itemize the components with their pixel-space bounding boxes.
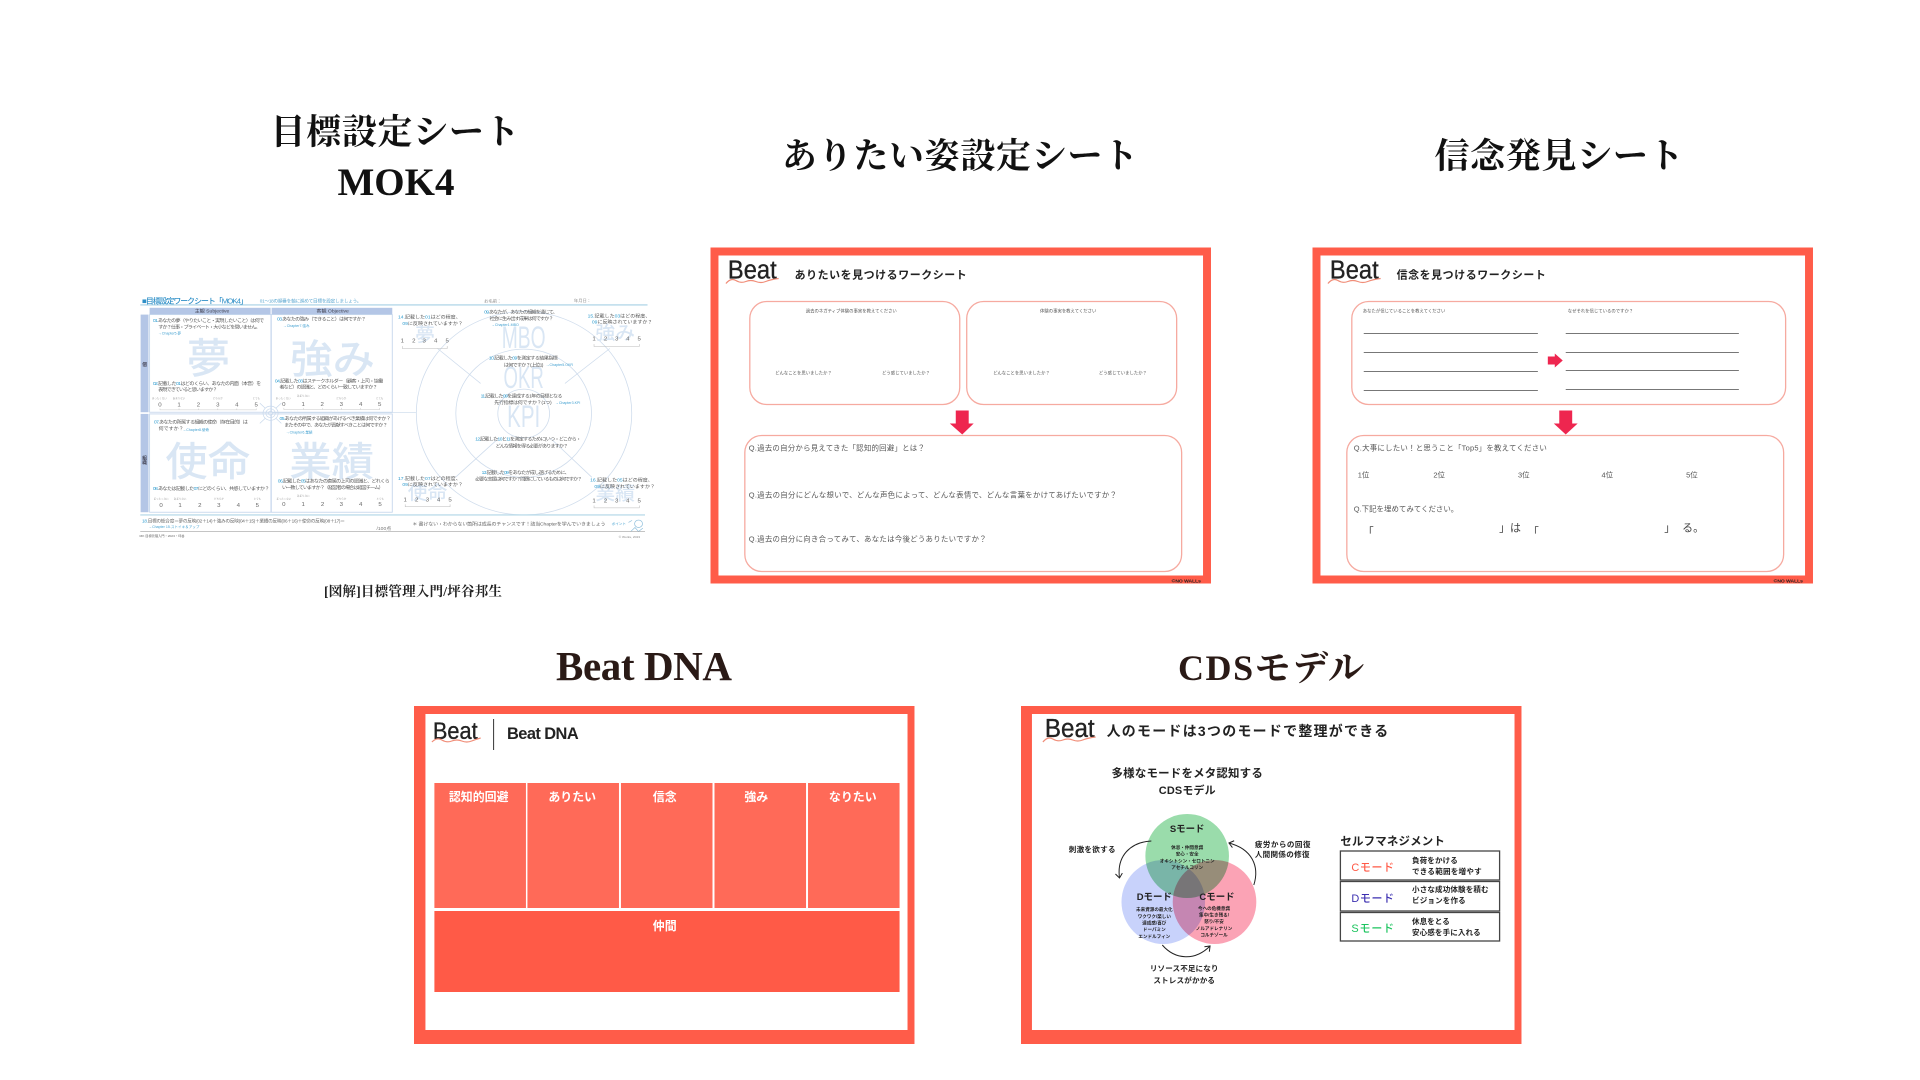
rating scales: left quadrants: とても: [376, 396, 384, 400]
box: top5: 3位: [1518, 469, 1530, 480]
header bands: 客観 Objective: [317, 308, 349, 315]
questions: left quadrants: →Chapter5.夢: [158, 330, 182, 335]
corner question: 16: 2: [604, 499, 607, 505]
questions: left quadrants: 04.記載した03はステークホルダー（顧客・上司・協働: [275, 378, 383, 384]
rating scales: left quadrants: [152, 393, 384, 509]
column: なりたい: なりたい: [829, 790, 877, 804]
corner question: 14: 5: [446, 339, 450, 345]
title: Beat DNA: Beat DNA: [556, 643, 732, 689]
box: questions: Q.過去の自分から見えてきた「認知的回避」とは？: [749, 442, 925, 453]
questions: diagram centre: 12.記載した10と11を測定するために(いつ・どこから・: [475, 436, 581, 443]
rating scales: left quadrants: 4: [359, 502, 363, 508]
column: 強み: [714, 783, 806, 908]
corner question: 15: 4: [626, 337, 630, 343]
logo: Beat: Beat: [433, 718, 478, 745]
label: 疲労からの回復: 疲労からの回復: [1255, 839, 1311, 849]
rating scales: left quadrants: 2: [321, 502, 324, 508]
venn diagram: ワクワク/楽しい: [1138, 913, 1171, 920]
column: 強み: 強み: [744, 789, 768, 804]
rating scales: left quadrants: 2: [321, 402, 324, 408]
column: 信念: 信念: [653, 789, 677, 804]
box: experience: [967, 302, 1177, 404]
self management table: [1340, 835, 1500, 941]
questions: left quadrants: またその中で、あなたが貢献すべきことは何ですか？: [284, 422, 388, 428]
slide heading: 信念を見つけるワークシート: [1397, 267, 1546, 282]
questions: left quadrants: 07.あなたの所属する組織の使命（存在目的）は: [154, 419, 248, 426]
caption: source: [図解]目標管理入門/坪谷邦生: [324, 583, 502, 599]
panel: MOK4 worksheet: [140, 296, 655, 539]
corner question: 17: 09に反映されていますか？: [402, 481, 463, 488]
corner question: 14: 夢: [415, 325, 435, 347]
corner question: 15: 5: [638, 337, 642, 343]
label: リソース不足: リソース不足になり: [1150, 964, 1219, 973]
footer of worksheet: © Works, 2023: [619, 535, 640, 539]
self management table: 休息をとる: [1412, 916, 1450, 926]
corner question: 16: 4: [626, 499, 630, 505]
rating scales: left quadrants: 4: [359, 402, 363, 408]
box: top5: 1位: [1358, 469, 1370, 480]
rating scales: left quadrants: どちらか: [214, 496, 224, 500]
corner question: 14: [398, 314, 463, 348]
quadrant cells: [150, 315, 392, 512]
corner question: 17: 1: [404, 498, 407, 504]
questions: diagram centre: 必要な支援は何ですか？問題にしているものは何ですか？: [475, 476, 582, 483]
venn diagram: 達成感/喜び: [1142, 919, 1167, 927]
panel: 信念を見つけるワークシート: [1316, 252, 1809, 585]
venn diagram: アセチルコリン: [1171, 865, 1203, 871]
corner question: 16: 業績: [595, 484, 635, 505]
box: top5: Q.下記を埋めてみてください。: [1354, 503, 1458, 514]
label: 疲労からの回復: [1255, 839, 1311, 859]
rating scales: left quadrants: まったくない: [154, 496, 169, 500]
corner question: 16: 5: [638, 499, 642, 505]
slide frame: [1021, 706, 1521, 1044]
icon: center target: [260, 403, 416, 423]
self management table: 負荷をかける: [1412, 855, 1458, 865]
questions: left quadrants: 06.記載した05はあなたの直属の上司の認識と、どれくら: [278, 478, 390, 484]
footer of worksheet: [140, 514, 645, 539]
questions: diagram centre: 社会に生み出す成果は何ですか？: [490, 315, 553, 322]
logo: Beat: Beat: [728, 256, 777, 285]
self management table: Sモード: [1351, 923, 1394, 935]
venn diagram: Cモード: [1199, 892, 1235, 903]
footer of worksheet: →Chapter 15.ストイキ＆アップ: [149, 524, 200, 529]
venn diagram: Dモード: [1137, 892, 1172, 903]
panel: CDS model: [1021, 706, 1521, 1044]
corner question: 15: 3: [615, 337, 619, 343]
corner question: 16: 16.記載した05はどの程度、: [590, 477, 653, 483]
questions: left quadrants: 者など）の認識と、どのくらい一致していますか？: [280, 384, 378, 390]
box: top5: 「: [1528, 525, 1539, 539]
rating scales: left quadrants: 5: [378, 402, 382, 408]
column: ありたい: ありたい: [548, 790, 596, 804]
rating scales: left quadrants: どちらか: [336, 396, 347, 400]
corner question: 16: [590, 477, 655, 508]
rating scales: left quadrants: 1: [177, 403, 181, 408]
slide frame: [714, 252, 1207, 580]
rating scales: left quadrants: とても: [376, 496, 384, 500]
questions: left quadrants: 08.あなたは記載した07にどのくらい、共感していますか？: [153, 485, 269, 492]
arrow: D to C: [1162, 945, 1210, 957]
corner question: 17: 使命: [408, 483, 447, 504]
box: questions: [745, 436, 1182, 572]
corner question: 14: 09に反映されていますか？: [402, 320, 463, 327]
slide heading: Beat DNA: [507, 725, 579, 743]
subheading: [1112, 766, 1263, 797]
questions: left quadrants: 02.記載した01はどのくらい、あなたの内面（本音）を: [153, 380, 261, 387]
venn diagram: オキシトシン・セロトニン: [1160, 857, 1215, 864]
rating scales: left quadrants: とても: [253, 396, 260, 400]
box: top5: 」: [1664, 522, 1675, 535]
rating scales: left quadrants: 2: [198, 503, 202, 509]
watermark: 夢 強み 使命 業績: [165, 336, 375, 484]
logo: Beat: Beat: [1045, 715, 1095, 743]
questions: diagram centre: [475, 309, 582, 483]
questions: left quadrants: →Chapter8.使命: [183, 427, 210, 432]
logo: Beat: Beat: [1330, 256, 1379, 285]
venn diagram: 未来資源の最大化: [1136, 906, 1173, 913]
rating scales: left quadrants: 1: [178, 503, 182, 509]
column: ありたい: [527, 783, 619, 908]
footer of worksheet: ＊ 書けない・わからない箇所は成長のチャンスです！該当Chapterを学んでいきましょう: [412, 521, 606, 527]
slide frame: [1316, 252, 1809, 580]
box: negative experience: どんなことを思いましたか？: [775, 369, 832, 377]
rating scales: left quadrants: まったくない: [276, 396, 291, 400]
venn diagram: [1121, 814, 1256, 944]
panel: Beat DNA: [414, 706, 914, 1044]
title: CDSモデル: CDSモデル: [1178, 648, 1364, 688]
box: questions: Q.過去の自分に向き合ってみて、あなたは今後どうありたいですか？: [749, 533, 987, 544]
self management table: 安心感を手に入れる: [1412, 927, 1481, 937]
questions: diagram centre: 09.あなたが、あなたの組織を通じて、: [484, 309, 558, 316]
questions: diagram centre: →Chapter3.KPI: [555, 401, 580, 405]
venn diagram: エンドルフィン: [1138, 934, 1171, 940]
watermark: MBO OKR KPI: KPI: [507, 399, 540, 434]
questions: diagram centre: 10.記載した09を測定する結果指標: [489, 355, 558, 362]
corner question: 16: 3: [615, 499, 619, 505]
questions: left quadrants: すか？仕事・プライベート・大小などを問いません。: [158, 324, 261, 330]
corner question: 15: 1: [592, 337, 596, 343]
questions: left quadrants: [153, 316, 391, 492]
venn diagram: ノルアドレナリン: [1196, 926, 1233, 932]
rating scales: left quadrants: 5: [255, 403, 259, 408]
column: なりたい: [808, 783, 900, 908]
box: negative experience: 過去のネガティブ体験の事実を教えてください: [806, 307, 897, 315]
venn diagram: 休息・仲間意識: [1171, 844, 1204, 851]
venn diagram: 安心・安全: [1176, 850, 1199, 858]
corner question: 17: 4: [437, 498, 441, 504]
box: top5: 「: [1363, 525, 1374, 539]
box: top5: 」: [1499, 522, 1510, 535]
box: experience: 体験の事実を教えてください: [1040, 307, 1097, 315]
label: リソース不足: ストレスがかかる: [1153, 975, 1215, 985]
rating scales: left quadrants: 4: [237, 503, 241, 509]
column: 認知的回避: [434, 783, 526, 908]
rating scales: left quadrants: 0: [282, 502, 286, 508]
venn diagram: 怒り/不安: [1204, 918, 1224, 925]
title: 目標設定シート MOK4: [270, 113, 520, 204]
row: 仲間: 仲間: [653, 918, 677, 933]
title: 信念発見シート: 信念発見シート: [1434, 137, 1684, 176]
box: top5: [1347, 436, 1784, 572]
questions: left quadrants: い一致していますか？（経営者の場合は経営チーム）: [282, 484, 384, 491]
box: negative experience: [750, 302, 960, 404]
corner question: 15: 09に反映されていますか？: [592, 319, 652, 325]
box: beliefs: [1352, 302, 1786, 404]
corner question: 14: 4: [434, 339, 438, 345]
rating scales: left quadrants: 1: [302, 402, 305, 408]
copyright: ©NO WALLs: [1774, 577, 1803, 585]
arrow: S to D: [1119, 841, 1151, 878]
slide heading: ありたいを見つけるワークシート: [795, 268, 967, 282]
footer of worksheet: ポイント: [612, 521, 626, 526]
self management table: 小さな成功体験を積む: [1412, 884, 1489, 894]
label: リソース不足: [1150, 964, 1219, 985]
box: beliefs: なぜそれを信じているのですか？: [1568, 307, 1633, 315]
watermark: 夢 強み 使命 業績: 強み: [290, 337, 375, 382]
slide heading: 人のモードは3つのモードで整理ができる: [1107, 723, 1388, 739]
header bands: 織: [142, 459, 147, 466]
rating scales: left quadrants: 0: [282, 402, 286, 408]
header bands: 主観 Subjective: [195, 308, 230, 315]
self management table: ビジョンを作る: [1412, 895, 1466, 905]
title: ありたい姿設定シート: ありたい姿設定シート: [782, 137, 1138, 176]
column: 認知的回避: 認知的回避: [449, 789, 509, 804]
corner question: 15: 15.記載した03はどの程度、: [588, 312, 650, 319]
questions: diagram centre: →Chapter1.MBO: [491, 323, 519, 327]
footer of worksheet: /100点: [376, 526, 391, 532]
subheading: 多様なモードをメタ認知する: [1112, 766, 1263, 780]
watermark: MBO OKR KPI: MBO: [502, 320, 546, 355]
box: top5: 5位: [1686, 469, 1698, 480]
corner question: 14: 1: [401, 339, 404, 345]
concentric circle diagram: [416, 312, 632, 515]
questions: left quadrants: 表現できていると思いますか？: [158, 386, 217, 393]
corner question: 15: 強み: [595, 323, 635, 344]
corner question: 17: 2: [415, 498, 418, 504]
worksheet heading: 01〜18の順番を軸に進めて目標を設定しましょう。: [260, 298, 361, 305]
rating scales: left quadrants: 0: [158, 403, 162, 408]
label: 刺激を欲する: 刺激を欲する: [1069, 844, 1116, 854]
rating scales: left quadrants: あまりない: [173, 396, 186, 400]
box: experience: どんなことを思いましたか？: [993, 369, 1050, 377]
worksheet heading: お名前：: [484, 298, 501, 303]
box: experience: どう感じていましたか？: [1099, 369, 1147, 377]
questions: diagram centre: 11.記載した09を達成する1年の目標となる: [481, 392, 563, 399]
column: 信念: [621, 783, 712, 908]
rating scales: left quadrants: 5: [256, 503, 260, 509]
corner question: 14: 3: [423, 339, 427, 345]
arrow: C to S: [1229, 843, 1256, 885]
rating scales: left quadrants: あまりない: [297, 494, 310, 498]
box: top5: Q.大事にしたい！と思うこと「Top5」を教えてください: [1354, 442, 1547, 453]
corner question: 17: [398, 475, 463, 507]
worksheet heading: 年月日：: [574, 297, 591, 303]
rating scales: left quadrants: まったくない: [276, 496, 292, 500]
corner question: 15: 2: [604, 337, 607, 343]
questions: left quadrants: →Chapter6.業績: [286, 430, 313, 435]
watermark: MBO OKR KPI: OKR: [504, 360, 544, 395]
questions: left quadrants: 03.あなたの強み（できること）は何ですか？: [277, 316, 366, 323]
row: 仲間: [434, 911, 900, 992]
venn diagram: 今への危機意識: [1198, 905, 1230, 912]
worksheet heading: [140, 296, 648, 305]
questions: left quadrants: 01.あなたの夢（やりたいこと・実現したいこと）は何で: [153, 317, 264, 324]
box: top5: は: [1510, 521, 1521, 535]
watermark: MBO OKR KPI: [502, 320, 546, 434]
slide frame: [414, 706, 914, 1044]
rating scales: left quadrants: 3: [340, 502, 344, 508]
header bands: 個: [142, 361, 147, 368]
questions: diagram centre: どんな情報を得る必要がありますか？: [496, 443, 568, 449]
self management table: Cモード: [1351, 862, 1394, 874]
rating scales: left quadrants: あまりない: [174, 496, 187, 500]
questions: left quadrants: 05.あなたの所属する組織があげるべき業績は何ですか？: [280, 415, 391, 422]
rating scales: left quadrants: あまりない: [297, 393, 310, 397]
corner question: 17: 3: [426, 498, 430, 504]
box: top5: る。: [1682, 522, 1704, 535]
rating scales: left quadrants: 1: [302, 502, 305, 508]
questions: diagram centre: 13.記載した09をあなたが成し遂げるために、: [482, 469, 570, 476]
box: beliefs: あなたが信じていることを教えてください: [1363, 307, 1446, 315]
questions: left quadrants: →Chapter7.強み: [283, 323, 310, 328]
footer of worksheet: MK 目標管理入門・2023・坪谷: [140, 533, 185, 538]
rating scales: left quadrants: 5: [378, 502, 382, 508]
rating scales: left quadrants: とても: [254, 496, 262, 500]
worksheet heading: ■目標設定ワークシート「MOK4」: [142, 296, 248, 305]
rating scales: left quadrants: どちらか: [336, 496, 347, 500]
venn diagram: コルチゾール: [1200, 932, 1228, 939]
questions: diagram centre: 先行指標は何ですか？(1つ): [494, 399, 552, 406]
rating scales: left quadrants: 3: [216, 403, 220, 408]
rating scales: left quadrants: 3: [217, 503, 221, 509]
arrow: down: [1554, 410, 1578, 434]
questions: diagram centre: は何ですか？(上位1): [504, 362, 544, 368]
watermark: 夢 強み 使命 業績: 夢: [187, 336, 230, 383]
box: top5: 2位: [1433, 469, 1446, 480]
corner question: 14: 2: [412, 339, 416, 345]
title: 目標設定シート MOK4: 目標設定シート: [270, 113, 520, 152]
header bands: [141, 308, 392, 512]
corner question: 14: 14.記載した01はどの程度、: [398, 314, 461, 321]
rating scales: left quadrants: 2: [197, 403, 200, 408]
venn diagram: ドーパミン: [1143, 926, 1166, 932]
corner question: 17: 17.記載した07はどの程度、: [398, 475, 461, 482]
corner question: 16: 09に反映されていますか？: [594, 483, 655, 490]
questions: left quadrants: 何ですか？: [159, 425, 184, 432]
questions: diagram centre: →Chapter5.OKR: [546, 363, 574, 367]
rating scales: left quadrants: まったくない: [152, 396, 167, 400]
footer of worksheet: 18.目標の総合度＝夢の反映(02＋14)＋強みの反映(04＋15)＋業績の反映(06＋16)＋使命の反映(08＋17)＝: [142, 518, 345, 525]
arrow: down: [950, 410, 974, 434]
watermark: 夢 強み 使命 業績: 業績: [289, 440, 374, 484]
rating scales: left quadrants: 0: [159, 503, 163, 509]
rating scales: left quadrants: どちらか: [213, 396, 223, 400]
self management table: セルフマネジメント: [1340, 835, 1445, 848]
copyright: ©NO WALLs: [1172, 577, 1201, 585]
box: negative experience: どう感じていましたか？: [882, 369, 930, 377]
watermark: 夢 強み 使命 業績: 使命: [165, 440, 250, 484]
corner question: 16: 1: [592, 499, 596, 505]
subheading: CDSモデル: [1159, 783, 1216, 797]
corner question: 15: [588, 312, 652, 346]
title: 目標設定シート MOK4: MOK4: [338, 161, 454, 204]
corner question: 17: 5: [448, 498, 452, 504]
venn diagram: Sモード: [1170, 824, 1204, 835]
rating scales: left quadrants: 3: [340, 402, 344, 408]
label: 疲労からの回復: 人間関係の修復: [1255, 849, 1310, 859]
rating scales: left quadrants: 4: [235, 403, 239, 408]
venn diagram: 集中/生き残る/: [1199, 911, 1230, 919]
header bands: 組: [142, 454, 147, 461]
box: questions: Q.過去の自分にどんな想いで、どんな声色によって、どんな表情で、どんな言葉をかけてあげたいですか？: [749, 489, 1117, 500]
box: top5: 4位: [1602, 469, 1614, 480]
self management table: Dモード: [1351, 893, 1394, 905]
panel: ありたいを見つけるワークシート: [714, 252, 1207, 585]
self management table: できる範囲を増やす: [1412, 866, 1482, 876]
